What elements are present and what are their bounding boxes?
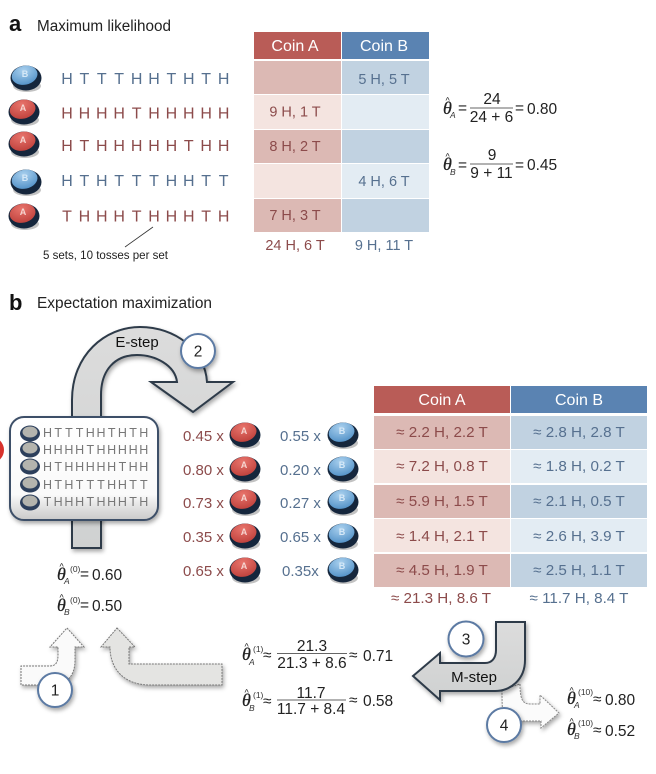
- row 2: ≈ 7.2 H, 0.8 T: [396, 458, 488, 475]
- formula: updated theta A: ≈: [263, 647, 272, 664]
- totals: [265, 238, 413, 254]
- initial parameter A: ^: [60, 562, 64, 572]
- icon: coin A: [8, 201, 40, 230]
- sequence row 3: HTHHHHHTHH: [61, 138, 229, 155]
- row 5 probabilities: A: [241, 561, 248, 571]
- formula: theta B estimate: 9: [488, 147, 496, 164]
- row 1: [254, 61, 429, 94]
- formula: updated theta A: 0.71: [363, 648, 393, 665]
- M-step label: M-step: [451, 669, 497, 686]
- arrow: parameter feedback: [101, 628, 222, 685]
- formula: theta A estimate: θ: [443, 98, 452, 118]
- arrow: convergence: [502, 684, 559, 728]
- header: coin B: [511, 386, 647, 413]
- final parameter A: θ: [567, 688, 576, 708]
- arrow: initial step: [21, 628, 84, 685]
- row 2: ≈ 1.8 H, 0.2 T: [533, 458, 625, 475]
- row 5 probabilities: 0.35x: [282, 563, 319, 580]
- row 5 probabilities: B: [339, 561, 346, 571]
- initial parameter A: [57, 562, 123, 586]
- initial parameter A: θ: [57, 564, 66, 584]
- step marker 3: [448, 622, 484, 656]
- header: coin A: Coin A: [418, 392, 466, 409]
- toss sequences panel a: [61, 71, 229, 226]
- formula: updated theta B: [242, 685, 393, 718]
- formula: theta B estimate: θ: [443, 154, 452, 174]
- step marker 2: 2: [194, 344, 202, 360]
- row 3: ≈ 5.9 H, 1.5 T: [396, 493, 488, 510]
- initial parameter B: (0): [70, 595, 81, 605]
- arrow: M-step: [413, 622, 525, 700]
- step marker 1: 1: [51, 682, 59, 700]
- formula: updated theta B: ^: [244, 688, 250, 698]
- formula: updated theta A: ^: [244, 642, 250, 652]
- heading: expectation maximization: Expectation maximization: [37, 295, 212, 312]
- row 5 probabilities: [183, 555, 358, 584]
- formula: theta B estimate: [443, 147, 557, 182]
- formula: updated theta A: 21.3: [297, 638, 327, 655]
- initial parameter B: =: [80, 597, 89, 614]
- row 4 probabilities: 0.65 x: [280, 529, 321, 546]
- final parameter A: A: [573, 700, 580, 710]
- formula: theta A estimate: 24: [483, 91, 501, 108]
- E-step label: E-step: [115, 334, 159, 351]
- formula: theta B estimate: B: [450, 167, 456, 177]
- formula: theta A estimate: [443, 91, 558, 126]
- red edge mark: [0, 437, 4, 463]
- totals: [391, 590, 628, 607]
- box: hidden coin sequences: [10, 417, 158, 520]
- formula: theta A estimate: 24 + 6: [470, 109, 513, 126]
- totals: 24 H, 6 T: [265, 238, 325, 254]
- formula: updated theta A: ≈: [349, 647, 358, 664]
- panel a: maximum likelihood: [8, 11, 558, 262]
- totals: 9 H, 11 T: [355, 238, 413, 254]
- sequence row 1: HTTTHHTHTH: [61, 71, 229, 88]
- row 3: ≈ 2.1 H, 0.5 T: [533, 493, 625, 510]
- sequence row 4: HTHTTTHHTT: [61, 173, 229, 190]
- row 1: ≈ 2.2 H, 2.2 T: [396, 424, 488, 441]
- annotation: sets and tosses: 5 sets, 10 tosses per set: [43, 250, 169, 262]
- formula: theta A estimate: A: [449, 110, 456, 120]
- formula: theta B estimate: =: [458, 157, 467, 174]
- panel letter a: a: [9, 11, 22, 36]
- header: coin A: [374, 386, 510, 413]
- row 3 probabilities: [183, 487, 358, 516]
- formula: updated theta B: ≈: [349, 692, 358, 709]
- annotation leader line: [125, 227, 153, 247]
- formula: theta B estimate: =: [515, 157, 524, 174]
- initial parameter A: =: [80, 566, 89, 583]
- row 1 probabilities: 0.55 x: [280, 428, 321, 445]
- row 4: [374, 519, 647, 552]
- final parameter A: [567, 686, 636, 710]
- final parameter B: θ: [567, 719, 576, 739]
- row 3: 8 H, 2 T: [269, 139, 321, 155]
- icon: coin B: [10, 63, 42, 92]
- initial parameter B: ^: [60, 592, 64, 602]
- row 3 probabilities: B: [339, 493, 346, 503]
- icon: coin B: B: [22, 69, 29, 79]
- formula: theta B estimate: 0.45: [527, 157, 557, 174]
- initial parameter B: θ: [57, 595, 66, 615]
- row 1 probabilities: [183, 420, 358, 449]
- panel letter b: b: [9, 290, 22, 315]
- totals: ≈ 11.7 H, 8.4 T: [530, 590, 628, 607]
- row 2 probabilities: 0.20 x: [280, 462, 321, 479]
- row 4 probabilities: 0.35 x: [183, 529, 224, 546]
- row 2 probabilities: 0.80 x: [183, 462, 224, 479]
- row 1 probabilities: B: [339, 426, 346, 436]
- row 1: 5 H, 5 T: [358, 72, 410, 88]
- final parameter B: ^: [570, 716, 574, 726]
- step marker 4: [487, 708, 521, 742]
- final parameter B: (10): [578, 718, 593, 728]
- row 5: ≈ 4.5 H, 1.9 T: [396, 562, 488, 579]
- header: coin A: [254, 32, 341, 59]
- row 5: ≈ 2.5 H, 1.1 T: [533, 562, 625, 579]
- box sequences: HTHHHHHTHH: [43, 460, 148, 474]
- initial parameter B: B: [64, 607, 70, 617]
- row 2 probabilities: A: [241, 460, 248, 470]
- final parameter B: 0.52: [605, 723, 635, 740]
- sequence row 5: THHHTHHHTH: [62, 208, 229, 226]
- header: coin B: Coin B: [360, 38, 408, 55]
- header: coin B: [342, 32, 429, 59]
- initial parameter B: 0.50: [92, 598, 123, 615]
- row 5: 7 H, 3 T: [269, 208, 321, 224]
- row 1: [374, 416, 647, 449]
- final parameter A: 0.80: [605, 692, 636, 709]
- row 4 probabilities: [183, 521, 358, 550]
- heading: maximum likelihood: Maximum likelihood: [37, 18, 171, 35]
- icon: coin A: [8, 97, 40, 126]
- table: expected counts: [374, 386, 647, 607]
- box sequences: THHHTHHHTH: [44, 495, 148, 509]
- formula: updated theta B: (1): [253, 690, 264, 700]
- formula: theta B estimate: 9 + 11: [470, 165, 513, 182]
- formula: theta A estimate: 0.80: [527, 101, 558, 118]
- row 4: ≈ 2.6 H, 3.9 T: [533, 528, 625, 545]
- step marker 2: [181, 334, 215, 368]
- formula: updated theta B: ≈: [263, 693, 272, 710]
- row 5: [254, 199, 429, 232]
- step marker 4: 4: [500, 718, 509, 734]
- formula: updated theta A: θ: [242, 644, 251, 664]
- step marker 3: 3: [462, 632, 470, 648]
- icon: coin A: A: [20, 103, 27, 113]
- row 3 probabilities: A: [241, 493, 248, 503]
- icon: coin A: A: [20, 135, 27, 145]
- header: coin B: Coin B: [555, 392, 603, 409]
- panel b: expectation maximization: [0, 290, 647, 742]
- row 5 probabilities: 0.65 x: [183, 563, 224, 580]
- icon: coin B: [10, 167, 42, 196]
- row 2: [374, 450, 647, 483]
- initial parameter B: [57, 592, 123, 617]
- row 2: [254, 95, 429, 129]
- formula: updated theta A: (1): [253, 644, 264, 654]
- final parameter A: ^: [570, 686, 574, 696]
- row 1 probabilities: A: [241, 426, 248, 436]
- row 3 probabilities: 0.73 x: [183, 495, 224, 512]
- formula: updated theta B: B: [249, 703, 255, 713]
- formula: theta B estimate: ^: [446, 152, 450, 162]
- row 4: [254, 164, 429, 198]
- row 4: 4 H, 6 T: [358, 174, 410, 190]
- formula: updated theta A: [242, 638, 393, 672]
- box sequences: HHHHTHHHHH: [43, 443, 148, 457]
- arrow: E-step: [72, 327, 233, 548]
- box sequences: HTTTHHTHTH: [43, 426, 148, 440]
- header: coin A: Coin A: [271, 38, 319, 55]
- formula: updated theta A: A: [248, 657, 255, 667]
- icon: coin B: B: [22, 173, 29, 183]
- row 3 probabilities: 0.27 x: [280, 495, 321, 512]
- final parameter A: ≈: [593, 691, 602, 708]
- icon: coin A: [8, 129, 40, 158]
- box sequences: HTHTTTHHTT: [43, 478, 148, 492]
- final parameter A: (10): [578, 687, 593, 697]
- step marker 1: [38, 673, 72, 707]
- initial parameter A: 0.60: [92, 567, 123, 584]
- row 4 probabilities: B: [339, 527, 346, 537]
- final parameter B: [567, 716, 635, 741]
- row 1 probabilities: 0.45 x: [183, 428, 224, 445]
- formula: theta A estimate: =: [458, 100, 467, 117]
- icon: coin A: A: [20, 207, 27, 217]
- box sequences: [43, 426, 148, 509]
- row 2 probabilities: [183, 454, 358, 483]
- formula: updated theta A: 21.3 + 8.6: [277, 655, 347, 672]
- probabilities and coins: [183, 420, 358, 584]
- final parameter B: ≈: [593, 722, 602, 739]
- totals: ≈ 21.3 H, 8.6 T: [391, 590, 491, 607]
- unknown coins: [20, 426, 40, 510]
- row 1: ≈ 2.8 H, 2.8 T: [533, 424, 625, 441]
- row 3: [254, 130, 429, 163]
- formula: theta A estimate: ^: [446, 96, 450, 106]
- row 4: ≈ 1.4 H, 2.1 T: [396, 528, 488, 545]
- formula: updated theta B: θ: [242, 690, 251, 710]
- initial parameter A: (0): [70, 564, 81, 574]
- row 5: [374, 554, 647, 587]
- formula: updated theta B: 11.7: [296, 685, 326, 702]
- table: maximum likelihood counts: [254, 32, 429, 254]
- formula: updated theta B: 0.58: [363, 693, 393, 710]
- row 3: [374, 485, 647, 518]
- row 2: 9 H, 1 T: [269, 104, 321, 120]
- initial parameter A: A: [63, 576, 70, 586]
- coin column panel a: [8, 63, 42, 230]
- sequence row 2: HHHHTHHHHH: [61, 106, 229, 122]
- formula: theta A estimate: =: [515, 100, 524, 117]
- formula: updated theta B: 11.7 + 8.4: [277, 701, 345, 718]
- row 4 probabilities: A: [241, 527, 248, 537]
- final parameter B: B: [574, 731, 580, 741]
- row 2 probabilities: B: [339, 460, 346, 470]
